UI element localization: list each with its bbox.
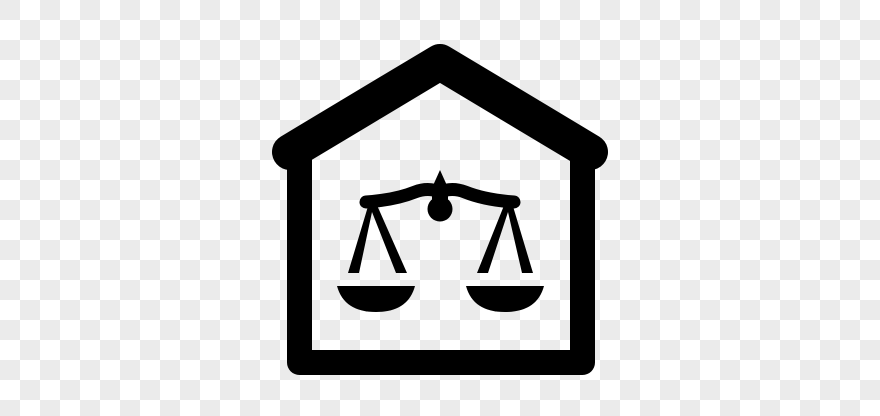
scales of justice (337, 170, 544, 312)
house outline (290, 62, 590, 362)
